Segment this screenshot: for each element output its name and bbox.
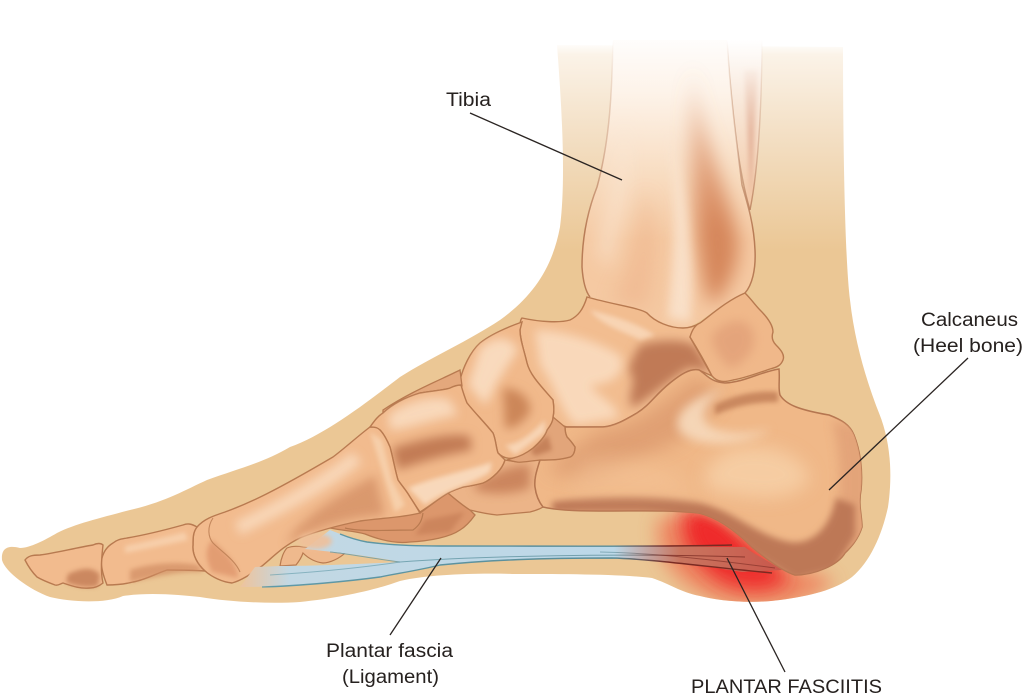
talus	[520, 297, 712, 427]
proximal toe bone	[101, 524, 205, 585]
outer ankle bone	[690, 293, 784, 381]
skin silhouette	[2, 45, 890, 603]
label: Plantar fascia (Ligament)	[326, 558, 453, 688]
leader line: Tibia	[470, 113, 622, 180]
cuneiform	[370, 370, 505, 512]
distal toe bone	[25, 544, 103, 588]
label: Calcaneus (Heel bone): Calcaneus	[921, 310, 1018, 331]
navicular	[460, 322, 554, 458]
tibia bone	[582, 40, 755, 328]
outer metatarsal	[330, 493, 475, 543]
plantar fascia ligament	[240, 530, 782, 587]
fibula	[727, 30, 762, 210]
red inflammation glow	[657, 508, 835, 607]
calcaneus heel bone	[535, 369, 870, 580]
sesamoid bones	[280, 546, 345, 566]
label: Calcaneus (Heel bone)	[829, 310, 1023, 490]
label: Calcaneus (Heel bone): (Heel bone)	[913, 336, 1023, 357]
small bone under navicular	[507, 417, 575, 462]
cuboid	[448, 460, 543, 515]
leader line: Plantar fascia	[390, 558, 441, 635]
label: Plantar fascia (Ligament): Plantar fascia	[326, 641, 453, 662]
foot illustration	[2, 30, 890, 607]
label: Plantar fasciitis	[691, 558, 882, 695]
label: Tibia: Tibia	[446, 90, 491, 111]
label: Plantar fascia (Ligament): (Ligament)	[342, 667, 439, 688]
leader line: Calcaneus	[829, 358, 968, 490]
big toe metatarsal	[193, 427, 420, 583]
label: Tibia	[446, 90, 622, 180]
leader line: Plantar fasciitis	[727, 558, 785, 672]
